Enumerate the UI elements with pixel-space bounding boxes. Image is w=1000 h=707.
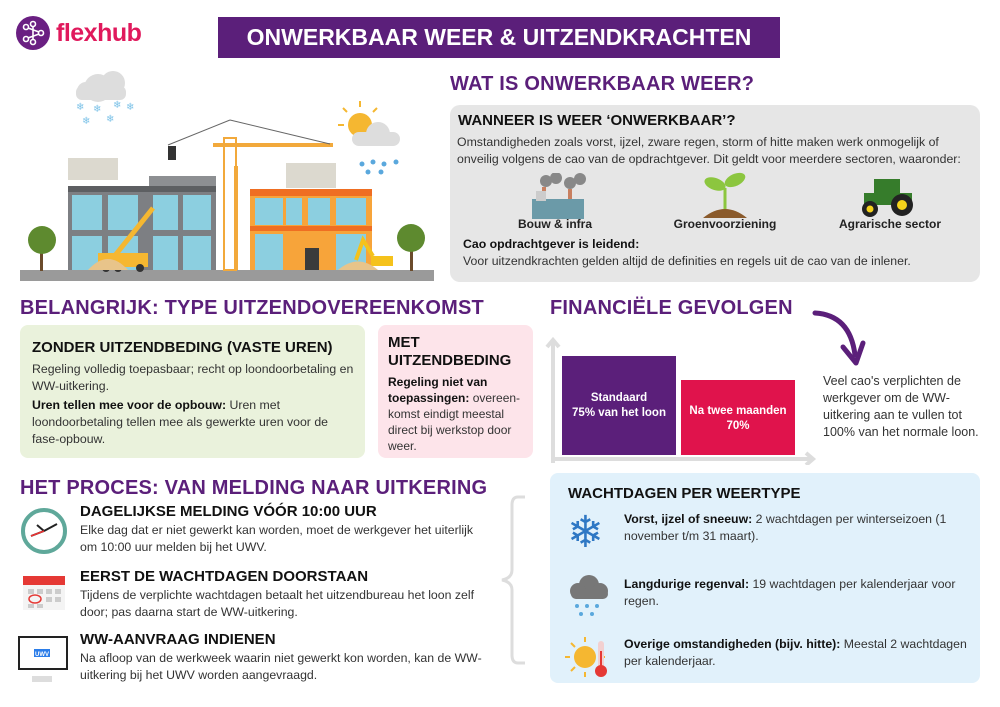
step 3 [18,631,482,682]
heading: financiele gevolgen: FINANCIËLE GEVOLGEN [550,297,793,319]
callout: aanvulling: Veel cao's verplichten de werkgever om de WW-uitkering aan te vullen tot 100% van het normale loon. [823,374,979,439]
step 2 [23,568,474,619]
icon: tractor [862,179,913,217]
bar chart: Na twee maanden [689,405,787,417]
illustration: construction site [20,71,434,281]
panel: zonder uitzendbeding: ZONDER UITZENDBEDING (VASTE UREN) [32,339,333,356]
cao leidend text [463,237,911,268]
label: bouw: Bouw & infra [518,217,592,231]
bar chart: 70% [726,420,750,432]
bar chart [546,337,816,465]
step 1: DAGELIJKSE MELDING VÓÓR 10:00 UUR [80,503,377,520]
panel: wachtdagen per weertype: Langdurige regenval: 19 wachtdagen per kalenderjaar voor regen. [624,577,956,608]
illustration: construction site: ❄ [126,102,134,113]
icon: snowflake: ❄ [567,508,604,557]
panel: zonder uitzendbeding: Uren tellen mee voor de opbouw: Uren met loondoorbetaling tellen mee als gewerkte uren voor de fase-opbouw. [32,398,328,446]
panel: wanneer onwerkbaar [450,105,980,282]
panel text: Omstandigheden zoals vorst, ijzel, zware regen, storm of hitte maken werk onmogelijk of onveilig volgens de cao van de opdrachtgever. Dit geldt voor meerdere sectoren, waaronder: [457,135,961,166]
cao leidend text: Voor uitzendkrachten gelden altijd de definities en regels uit de cao van de inlener. [463,254,911,268]
panel: wachtdagen per weertype [550,473,980,683]
icon: sprout [703,172,747,218]
heading: wat is onwerkbaar weer: WAT IS ONWERKBAAR WEER? [450,73,754,95]
illustration: construction site: ❄ [106,114,114,125]
illustration: construction site: ❄ [82,116,90,127]
illustration: construction site: ❄ [93,104,101,115]
panel: wachtdagen per weertype: Vorst, ijzel of sneeuw: 2 wachtdagen per winterseizoen (1 november t/m 31 maart). [624,512,946,543]
panel: zonder uitzendbeding [20,325,365,458]
panel: wachtdagen per weertype: WACHTDAGEN PER WEERTYPE [568,485,801,502]
step 3: Na afloop van de werkweek waarin niet gewerkt kon worden, kan de WW-uitkering bij het UWV worden aangevraagd. [80,651,482,682]
step 2: EERST DE WACHTDAGEN DOORSTAAN [80,568,368,585]
title bar [218,17,780,58]
label: groen: Groenvoorziening [674,217,776,231]
brace [502,496,525,664]
logo [16,16,141,50]
icon: clock [21,508,67,554]
icon: rain cloud [570,575,608,616]
heading: het proces: HET PROCES: VAN MELDING NAAR UITKERING [20,477,487,499]
step 3: WW-AANVRAAG INDIENEN [80,631,276,648]
bar chart: Standaard [591,392,647,404]
panel: wachtdagen per weertype: Overige omstandigheden (bijv. hitte): Meestal 2 wachtdagen per kalenderjaar. [624,637,967,668]
panel heading: WANNEER IS WEER ‘ONWERKBAAR’? [458,112,736,129]
logo: flexhub [56,19,141,47]
panel: zonder uitzendbeding: Regeling volledig toepasbaar; recht op loondoorbetaling en WW-uitkering. [32,362,353,393]
icon: computer uwv [18,636,68,682]
panel: met uitzendbeding: MET [388,334,420,351]
panel: met uitzendbeding [378,325,533,458]
illustration: construction site: ❄ [76,102,84,113]
icon: computer uwv: UWV [35,652,49,658]
step 2: Tijdens de verplichte wachtdagen betaalt het uitzendbureau het loon zelf door; pas daarna start de WW-uitkering. [80,588,474,619]
step 1 [21,502,473,554]
label: agrarisch: Agrarische sector [839,217,941,231]
step 1: Elke dag dat er niet gewerkt kan worden, moet de werkgever het uiterlijk om 10:00 uur melden bij het UWV. [80,523,473,554]
panel: met uitzendbeding: UITZENDBEDING [388,352,511,369]
icon: factory [532,173,586,219]
icon: calendar [23,576,65,610]
panel: met uitzendbeding: Regeling niet van toepassingen: overeen-komst eindigt meestal direct bij werkstop door weer. [388,375,520,453]
bar chart: 75% van het loon [572,407,666,419]
icon: sun thermometer [565,637,607,677]
heading: belangrijk: BELANGRIJK: TYPE UITZENDOVEREENKOMST [20,297,484,319]
title bar: ONWERKBAAR WEER & UITZENDKRACHTEN [247,24,751,50]
arrow: curved [812,310,866,366]
cao leidend text: Cao opdrachtgever is leidend: [463,237,639,251]
illustration: construction site: ❄ [113,100,121,111]
